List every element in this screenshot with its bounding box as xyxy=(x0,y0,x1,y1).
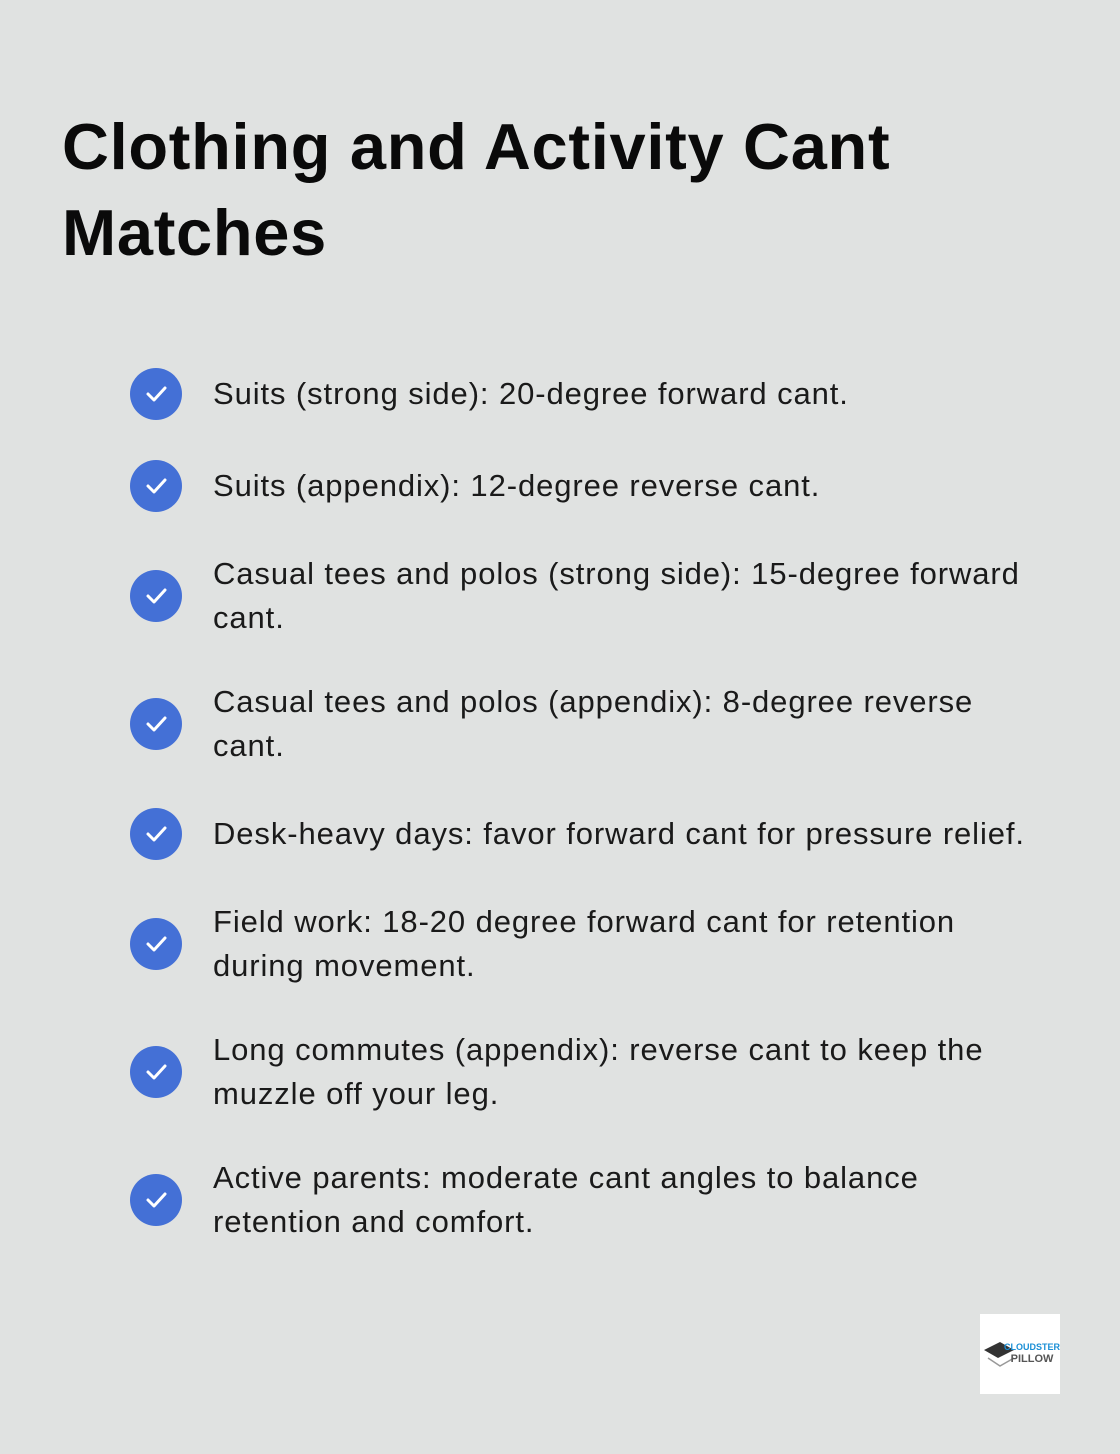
item 4: cant. xyxy=(213,728,285,763)
item 4 xyxy=(130,684,973,763)
item 7: Long commutes (appendix): reverse cant to keep the xyxy=(213,1032,983,1067)
title: Matches xyxy=(62,196,327,269)
item 8: retention and comfort. xyxy=(213,1204,534,1239)
item 6: Field work: 18-20 degree forward cant for retention xyxy=(213,904,955,939)
item 1: Suits (strong side): 20-degree forward cant. xyxy=(213,376,849,411)
item 8: Active parents: moderate cant angles to balance xyxy=(213,1160,919,1195)
item 7: muzzle off your leg. xyxy=(213,1076,499,1111)
item 8 xyxy=(130,1160,919,1239)
item 6 xyxy=(130,904,955,983)
item 5: Desk-heavy days: favor forward cant for pressure relief. xyxy=(213,816,1025,851)
item 3 xyxy=(130,556,1020,635)
logo: PILLOW xyxy=(1011,1353,1054,1365)
item 4: Casual tees and polos (appendix): 8-degree reverse xyxy=(213,684,973,719)
item 7 xyxy=(130,1032,983,1111)
item 3: cant. xyxy=(213,600,285,635)
title: Clothing and Activity Cant xyxy=(62,110,890,183)
logo xyxy=(980,1314,1060,1394)
item 2 xyxy=(130,460,820,512)
logo: CLOUDSTER xyxy=(1004,1342,1060,1352)
item 2: Suits (appendix): 12-degree reverse cant. xyxy=(213,468,820,503)
item 5 xyxy=(130,808,1025,860)
item 3: Casual tees and polos (strong side): 15-degree forward xyxy=(213,556,1020,591)
item 6: during movement. xyxy=(213,948,476,983)
title xyxy=(62,110,890,269)
item 1 xyxy=(130,368,849,420)
